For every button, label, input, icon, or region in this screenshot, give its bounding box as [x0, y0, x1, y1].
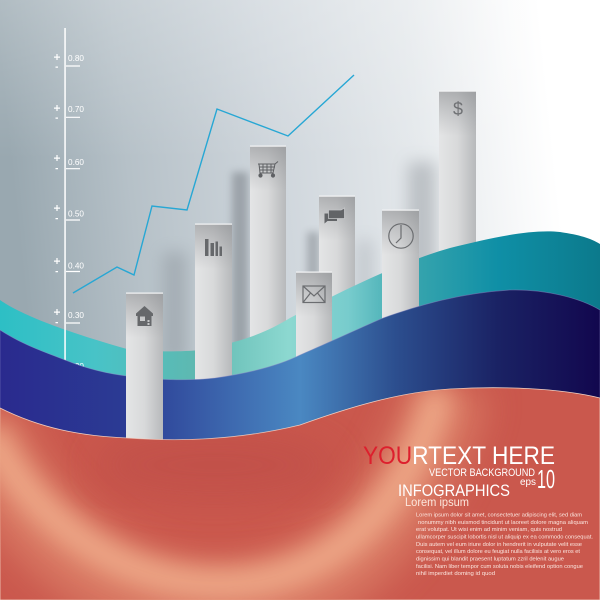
- wave: teal: [0, 231, 600, 400]
- icon: envelope: [303, 286, 325, 302]
- axis scale: 0.20: [68, 361, 84, 371]
- bar: dollar: [439, 90, 476, 261]
- wave: blue: [0, 290, 600, 460]
- body text: nonummy nibh euismod tincidunt ut laoreet dolore magna aliquam: [418, 520, 588, 526]
- axis scale: 0.50: [68, 208, 84, 218]
- body text: ullamcorper suscipit lobortis nisl ut aliquip ex ea commodo consequat.: [416, 534, 593, 540]
- body text: dignissim qui blandit praesent luptatum zzril delenit augue: [416, 556, 564, 562]
- heading: infographics: INFOGRAPHICS: [398, 481, 510, 500]
- title: YOURTEXT HERE: [363, 442, 555, 470]
- icon: house: [136, 306, 153, 326]
- bar: clock: [382, 210, 419, 340]
- body text: facilisi. Nam liber tempor cum soluta nobis eleifend option congue: [416, 564, 583, 570]
- axis scale: 0.60: [68, 157, 84, 167]
- icon: dollar sign: $: [453, 99, 463, 119]
- subheading: lorem ipsum: Lorem ipsum: [405, 497, 469, 509]
- bar: envelope: [296, 272, 332, 372]
- label: 10: 10: [537, 464, 555, 494]
- body text: [416, 512, 593, 577]
- bar: house: [126, 292, 163, 443]
- icon: clock: [389, 224, 413, 248]
- axis scale: 0.40: [68, 260, 84, 270]
- bar: shopping cart: [250, 146, 286, 356]
- body text: nihil imperdiet doming id quod: [416, 571, 495, 577]
- bar: bar chart: [195, 224, 232, 384]
- wave: red: [0, 385, 600, 600]
- subtitle: vector background: VECTOR BACKGROUND: [429, 467, 535, 479]
- body text: erat volutpat. Ut wisi enim ad minim veniam, quis nostrud: [416, 527, 562, 533]
- axis scale: [54, 28, 84, 371]
- line chart: [73, 75, 354, 293]
- axis scale: 0.70: [68, 104, 84, 114]
- icon: speech bubbles: [324, 208, 344, 224]
- bar shadows: [163, 162, 436, 362]
- body text: Duis autem vel eum iriure dolor in hendrerit in vulputate velit esse: [416, 542, 582, 548]
- icon: shopping cart: [258, 162, 278, 177]
- icon: bar chart: [205, 239, 222, 256]
- body text: consequat, vel illum dolore eu feugiat nulla facilisis at vero eros et: [416, 549, 580, 555]
- axis scale: 0.30: [68, 310, 84, 320]
- axis scale: 0.80: [68, 53, 84, 63]
- label: eps: eps: [520, 476, 536, 488]
- bar: speech bubbles: [319, 196, 355, 316]
- body text: Lorem ipsum dolor sit amet, consectetuer adipiscing elit, sed diam: [416, 512, 582, 518]
